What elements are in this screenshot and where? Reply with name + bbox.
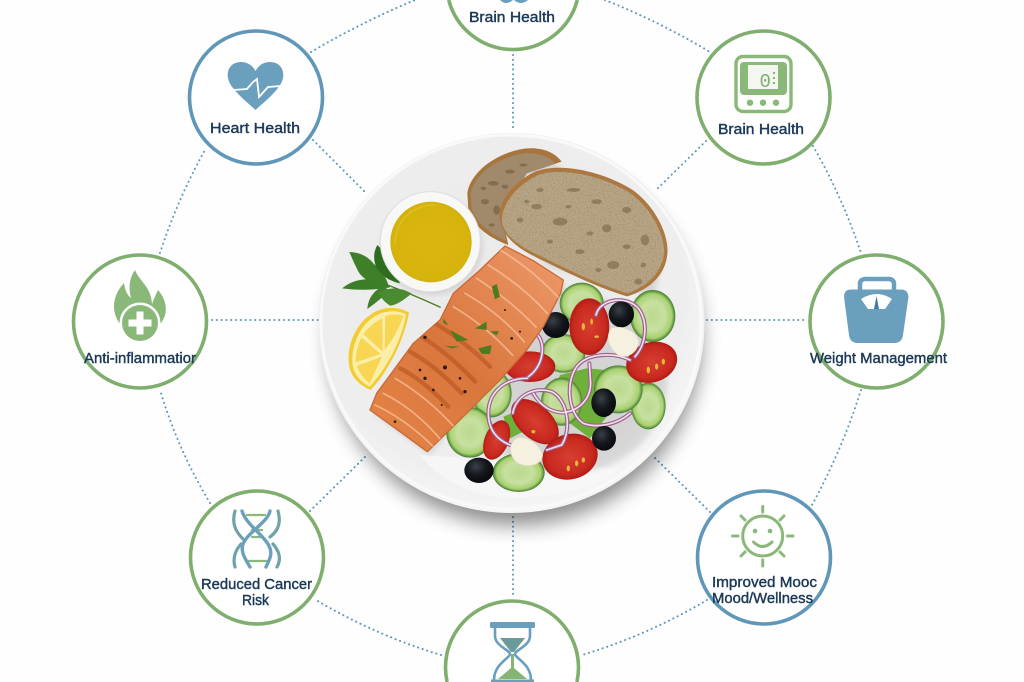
node: Brain Health (top): Brain Health [469, 9, 555, 26]
icon: weighing scale [844, 279, 908, 343]
cheese pieces [510, 327, 638, 466]
lettuce [503, 368, 607, 438]
node: Reduced Cancer Risk [190, 491, 324, 624]
node: Heart Health: Heart Health [210, 120, 300, 137]
node: Reduced Cancer Risk: Risk [242, 592, 269, 609]
lemon wedge [349, 308, 409, 390]
node: Brain Health (monitor): Brain Health [718, 121, 804, 138]
food scene (coordinates in 3x crop space) [342, 148, 683, 492]
node: Anti-inflammation [74, 255, 206, 388]
herb sprig [342, 245, 441, 309]
dotted connector network [160, 0, 861, 655]
red onion rings [488, 300, 645, 450]
icon: brain (cropped) [500, 0, 528, 3]
cucumber slices [446, 283, 675, 492]
node: Improved Mood [698, 491, 830, 624]
bread slice, back [467, 148, 562, 245]
node: Improved Mood: Improved Mooc [712, 574, 818, 591]
node: Weight Management: Weight Management [810, 350, 948, 367]
node: Reduced Cancer Risk: Reduced Cancer [201, 576, 312, 593]
bread slice, front [500, 167, 670, 298]
icon: hourglass [490, 622, 535, 682]
icon: smiling sun [732, 506, 793, 566]
icon: monitor device: 0 [760, 71, 771, 93]
plate [318, 133, 704, 513]
salmon fillet [370, 246, 563, 452]
node: Longevity (hourglass, cropped) [446, 601, 579, 682]
icon: flame with plus [114, 270, 166, 344]
node: Brain Health (monitor) [697, 31, 830, 164]
salad [446, 283, 683, 492]
node: Anti-inflammation: Anti-inflammatior [84, 350, 196, 367]
tomato wedges [478, 298, 683, 486]
node: Weight Management [810, 255, 948, 388]
icon: heart with pulse [228, 62, 283, 110]
node: Heart Health [190, 31, 322, 164]
black olives [464, 301, 634, 483]
icon: DNA helix [234, 511, 279, 567]
node: Improved Mood: Mood/Wellness [712, 590, 813, 607]
olive oil bowl [380, 192, 480, 292]
food shadows [373, 153, 667, 473]
node: Brain Health (top) [449, 0, 577, 50]
plate shadow [329, 155, 701, 525]
